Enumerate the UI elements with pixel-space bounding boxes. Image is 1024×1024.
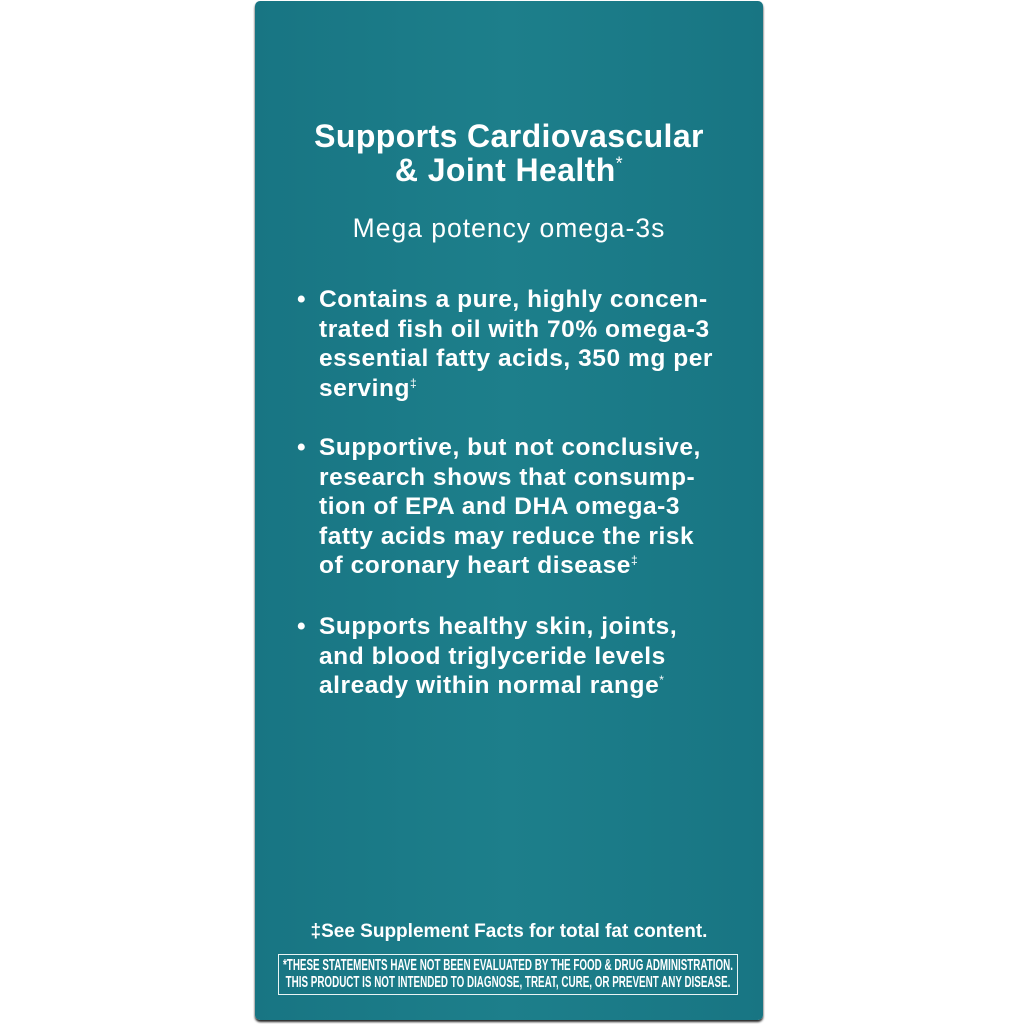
bullet 3 [319,612,759,700]
title: Supports Cardiovascular [314,118,704,154]
bullet 1 [319,285,759,403]
disclaimer box [278,954,738,995]
title: & Joint Health* [395,152,623,188]
title [314,118,704,188]
bullet 1: serving‡ [319,374,417,402]
bullet 3: already within normal range* [319,672,664,699]
bullet 2: tion of EPA and DHA omega-3 [319,493,680,520]
panel: product box side [255,1,763,1020]
bullet 1: trated fish oil with 70% omega-3 [319,316,710,342]
bullet 1: Contains a pure, highly concen- [319,286,708,313]
footnote: ‡See Supplement Facts for total fat content. [311,921,707,942]
bullet 3: Supports healthy skin, joints, [319,613,677,640]
disclaimer box: THIS PRODUCT IS NOT INTENDED TO DIAGNOSE, TREAT, CURE, OR PREVENT ANY DISEASE. [286,974,730,991]
bullet 2: Supportive, but not conclusive, [319,434,701,461]
subtitle: Mega potency omega-3s [353,213,665,243]
bullet 2 [319,433,759,580]
bullet 2: fatty acids may reduce the risk [319,522,694,550]
bullet 3: and blood triglyceride levels [319,642,666,670]
bullet 1: essential fatty acids, 350 mg per [319,345,713,372]
bullet 2: of coronary heart disease‡ [319,552,638,579]
bullet 2: research shows that consump- [319,464,695,490]
disclaimer box: *THESE STATEMENTS HAVE NOT BEEN EVALUATED BY THE FOOD & DRUG ADMINISTRATION. [283,957,733,974]
